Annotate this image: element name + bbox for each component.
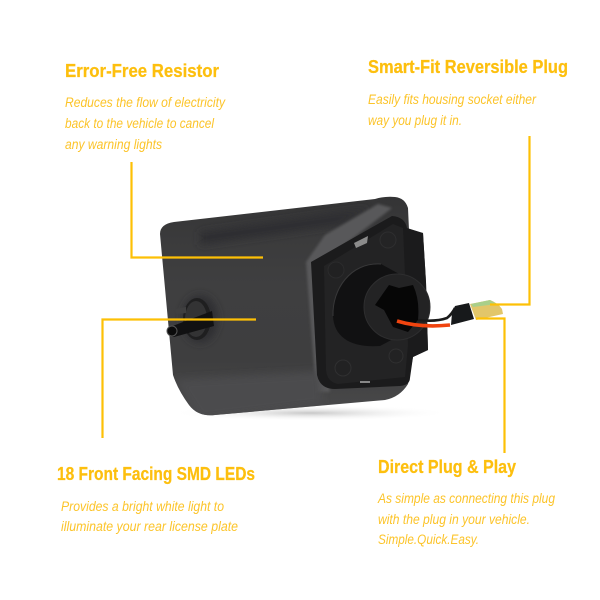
plate clip <box>354 236 368 248</box>
block: Error-Free Resistor <box>65 61 226 152</box>
description: back to the vehicle to cancel <box>65 116 215 131</box>
description: Provides a bright white light to <box>61 499 224 514</box>
callout line: LEDs <box>102 320 256 438</box>
heading: Direct Plug & Play <box>378 457 516 477</box>
description: As simple as connecting this plug <box>377 491 555 506</box>
connector socket barrel <box>333 264 410 346</box>
callout line: resistor <box>132 162 263 258</box>
description <box>368 92 536 128</box>
callout line: reversible plug <box>490 136 530 304</box>
heading: 18 Front Facing SMD LEDs <box>57 464 255 484</box>
soft shading on housing <box>175 204 392 420</box>
block: Smart-Fit Reversible Plug <box>368 57 568 128</box>
wire and connector plug <box>397 300 503 326</box>
product: side marker light housing <box>160 197 503 421</box>
callout line: plug and play <box>476 318 504 453</box>
description: way you plug it in. <box>368 113 462 128</box>
block: Direct Plug & Play <box>377 457 555 547</box>
description: Reduces the flow of electricity <box>65 95 226 110</box>
description <box>65 95 226 152</box>
description: with the plug in your vehicle. <box>378 512 530 527</box>
description: Simple.Quick.Easy. <box>378 532 479 547</box>
housing body <box>160 197 428 415</box>
description <box>61 499 238 534</box>
description: Easily fits housing socket either <box>368 92 536 107</box>
heading: Smart-Fit Reversible Plug <box>368 57 568 77</box>
socket hole <box>375 285 418 332</box>
block: 18 Front Facing SMD LEDs <box>57 464 255 534</box>
description: any warning lights <box>65 137 162 152</box>
description: illuminate your rear license plate <box>61 519 238 534</box>
mounting plate <box>311 216 428 389</box>
bolt stud on left <box>182 295 218 343</box>
plate screw recesses <box>335 360 351 376</box>
description <box>377 491 555 547</box>
heading: Error-Free Resistor <box>65 61 219 81</box>
